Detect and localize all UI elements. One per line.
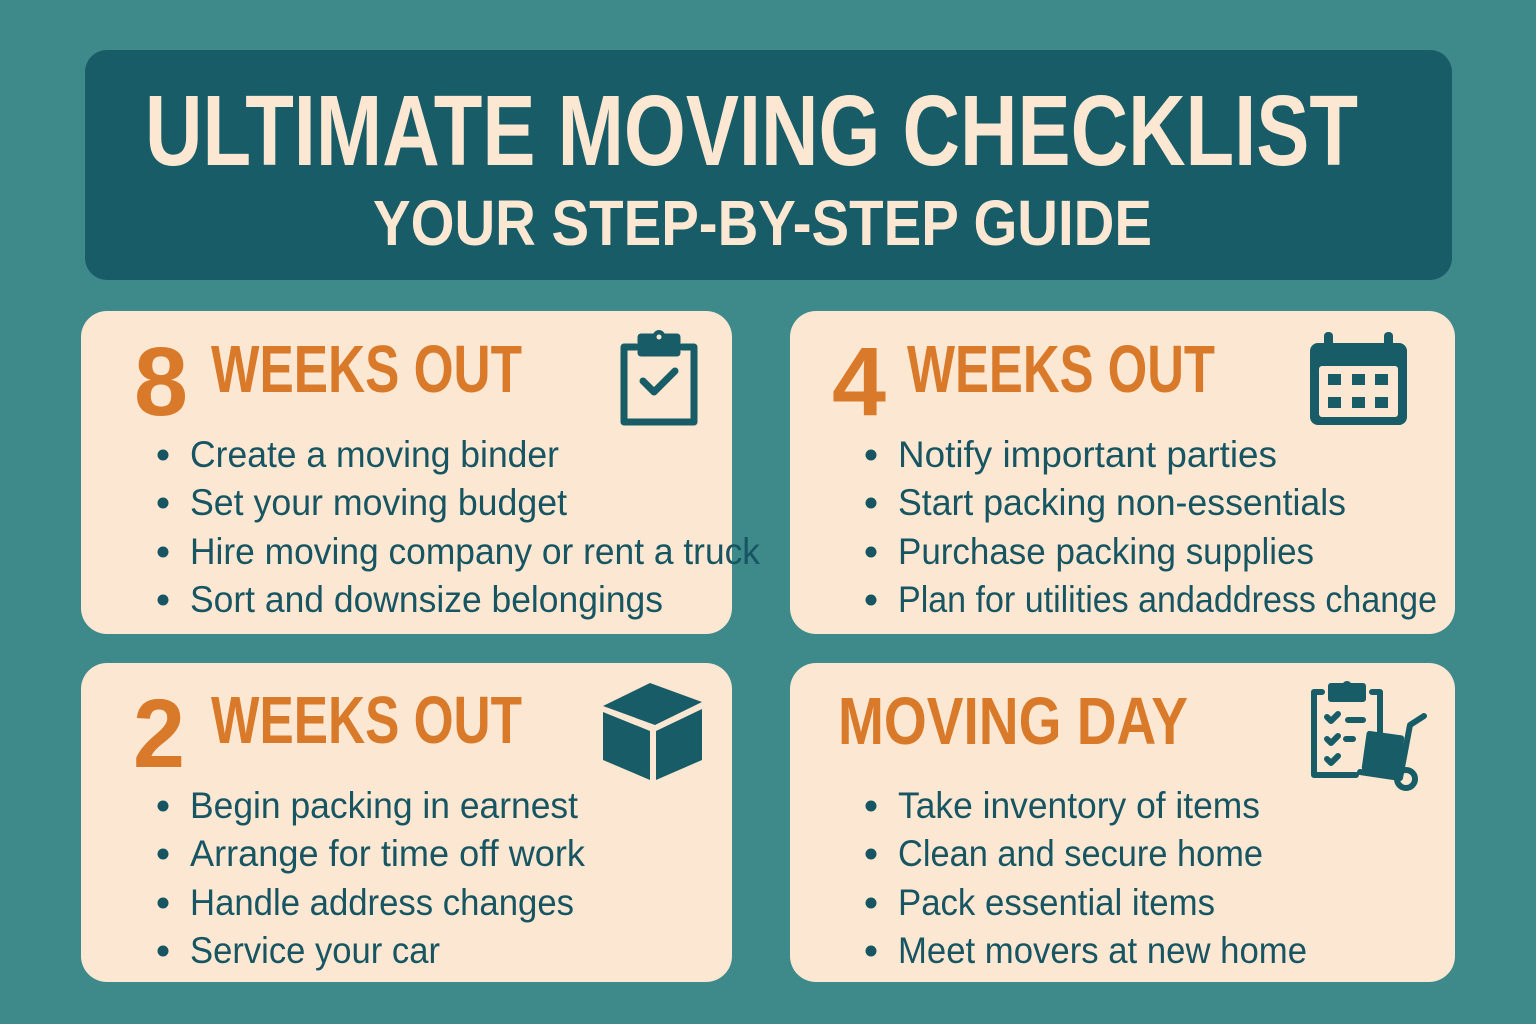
checklist items: Pack essential items	[898, 882, 1215, 923]
icon: clipboard check	[624, 330, 694, 422]
heading: 2 weeks out: 2	[133, 679, 185, 788]
heading: 8 weeks out: WEEKS OUT	[211, 332, 522, 407]
checklist items: Take inventory of items	[898, 785, 1260, 826]
checklist items: Notify important parties	[898, 434, 1277, 475]
checklist items: Meet movers at new home	[898, 930, 1307, 971]
heading: moving day: MOVING DAY	[838, 684, 1188, 759]
heading: 4 weeks out	[832, 327, 1215, 436]
checklist items: Arrange for time off work	[190, 833, 585, 874]
heading: 8 weeks out	[134, 327, 522, 436]
heading: 4 weeks out: WEEKS OUT	[907, 332, 1215, 407]
heading: 8 weeks out: 8	[134, 327, 188, 436]
checklist items: Hire moving company or rent a truck	[190, 531, 760, 572]
panel: 2 weeks out	[81, 663, 732, 982]
checklist items	[866, 785, 1307, 971]
panel: 8 weeks out	[81, 311, 760, 634]
panel: 4 weeks out	[790, 311, 1455, 634]
checklist items	[866, 434, 1437, 620]
icon: calendar	[1310, 332, 1407, 425]
checklist items: Set your moving budget	[190, 482, 568, 523]
heading: 2 weeks out: WEEKS OUT	[211, 683, 522, 758]
checklist items	[158, 785, 585, 971]
checklist items: Purchase packing supplies	[898, 531, 1314, 572]
checklist items: Begin packing in earnest	[190, 785, 579, 826]
checklist items: Handle address changes	[190, 882, 574, 923]
checklist items: Sort and downsize belongings	[190, 579, 663, 620]
subtitle: YOUR STEP-BY-STEP GUIDE	[373, 187, 1152, 259]
heading: 4 weeks out: 4	[832, 327, 886, 436]
heading: 2 weeks out	[133, 679, 522, 788]
icon: box	[603, 683, 702, 780]
icon: clipboard and hand truck	[1314, 681, 1424, 788]
checklist items: Start packing non-essentials	[898, 482, 1346, 523]
panel: moving day	[790, 663, 1455, 982]
checklist items: Clean and secure home	[898, 833, 1263, 874]
checklist items: Create a moving binder	[190, 434, 559, 475]
checklist items	[158, 434, 760, 620]
checklist items: Plan for utilities andaddress change	[898, 579, 1437, 620]
header banner	[85, 50, 1452, 280]
checklist items: Service your car	[190, 930, 440, 971]
